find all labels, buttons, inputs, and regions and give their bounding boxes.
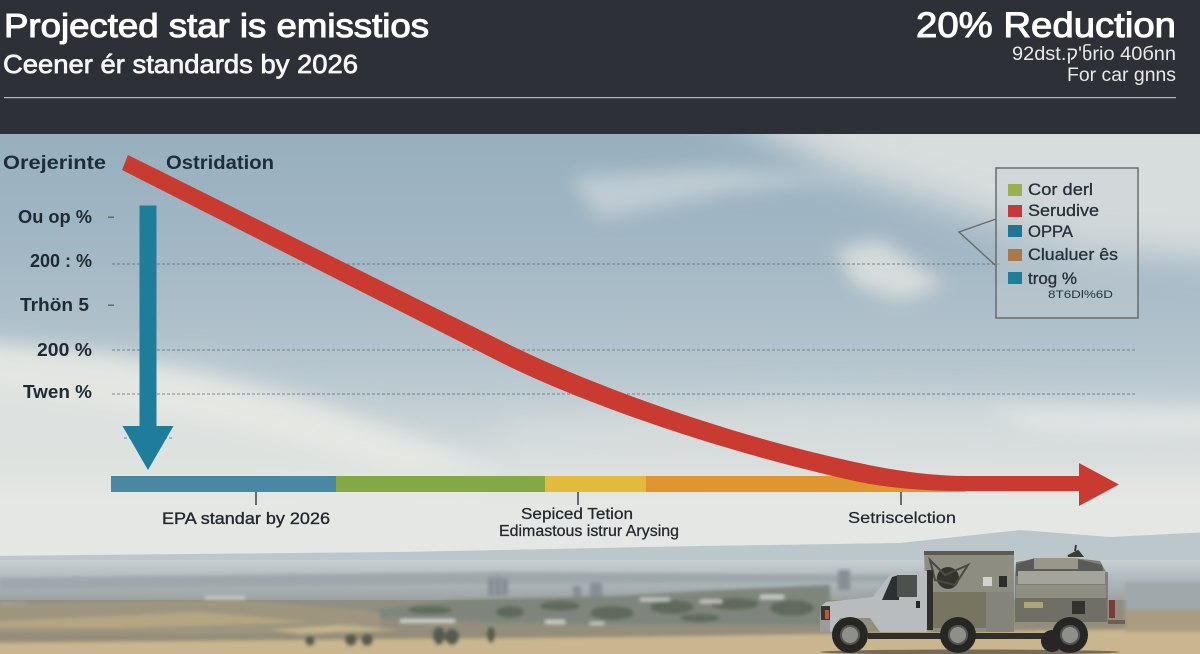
- title: Projected star is emisstios: [4, 7, 429, 44]
- timeline label two: Edimastous istrur Arysing: [499, 523, 679, 540]
- axis label: left: Orejerinte: [3, 153, 106, 174]
- timeline tick three: [900, 492, 902, 505]
- segmented timeline bar: [111, 476, 966, 492]
- subtitle: Ceener ér standards by 2026: [3, 49, 358, 79]
- truck rear body: [1015, 558, 1108, 622]
- legend item: trog %: [1028, 270, 1077, 288]
- legend item: [1008, 223, 1073, 241]
- wheels: [832, 617, 1088, 653]
- background: sky photograph: [0, 134, 1200, 556]
- timeline tick two: [577, 492, 579, 505]
- stat detail line two: For car gnns: [1067, 65, 1176, 86]
- gridlines: [112, 264, 1135, 438]
- headline stat: 20% Reduction: [916, 6, 1176, 45]
- y axis labels: Twen %: [23, 381, 92, 402]
- y axis labels: 200 %: [37, 339, 92, 360]
- timeline label two: [499, 506, 679, 540]
- legend item: Cor derl: [1028, 181, 1093, 199]
- y axis labels: [18, 206, 92, 402]
- legend item: [1008, 181, 1093, 199]
- y axis ticks: [108, 216, 114, 306]
- legend item: [1008, 270, 1077, 288]
- y axis labels: 200 : %: [30, 250, 92, 271]
- legend item: Serudive: [1028, 202, 1099, 220]
- red declining arrow: [122, 155, 1119, 506]
- timeline tick one: [255, 492, 257, 505]
- service truck: [820, 545, 1125, 654]
- legend callout: [959, 168, 1138, 318]
- legend footnote: 8T6Dl%6D: [1048, 289, 1113, 301]
- header band: [0, 0, 1200, 134]
- timeline label three: Setriscelction: [848, 510, 956, 527]
- chassis: [868, 633, 1068, 639]
- truck cab: [820, 571, 927, 632]
- legend item: OPPA: [1028, 223, 1073, 241]
- axis label: right: Ostridation: [166, 153, 274, 174]
- town band: [340, 585, 830, 625]
- stat detail line one: 92dst.ק'ნrio 40бnn: [1012, 44, 1176, 65]
- hazy bands: [0, 572, 900, 590]
- header rule: [4, 97, 1176, 98]
- blue downward arrow: [122, 206, 174, 470]
- legend item: Clualuer ês: [1028, 246, 1118, 264]
- city skyline: [488, 570, 850, 598]
- truck utility box: [924, 552, 1014, 632]
- timeline label two: Sepiced Tetion: [521, 506, 633, 523]
- y axis labels: Ou op %: [18, 206, 92, 227]
- landscape with city: [0, 530, 1200, 654]
- timeline label one: EPA standar by 2026: [162, 509, 330, 528]
- y axis labels: Trhön 5: [20, 294, 89, 315]
